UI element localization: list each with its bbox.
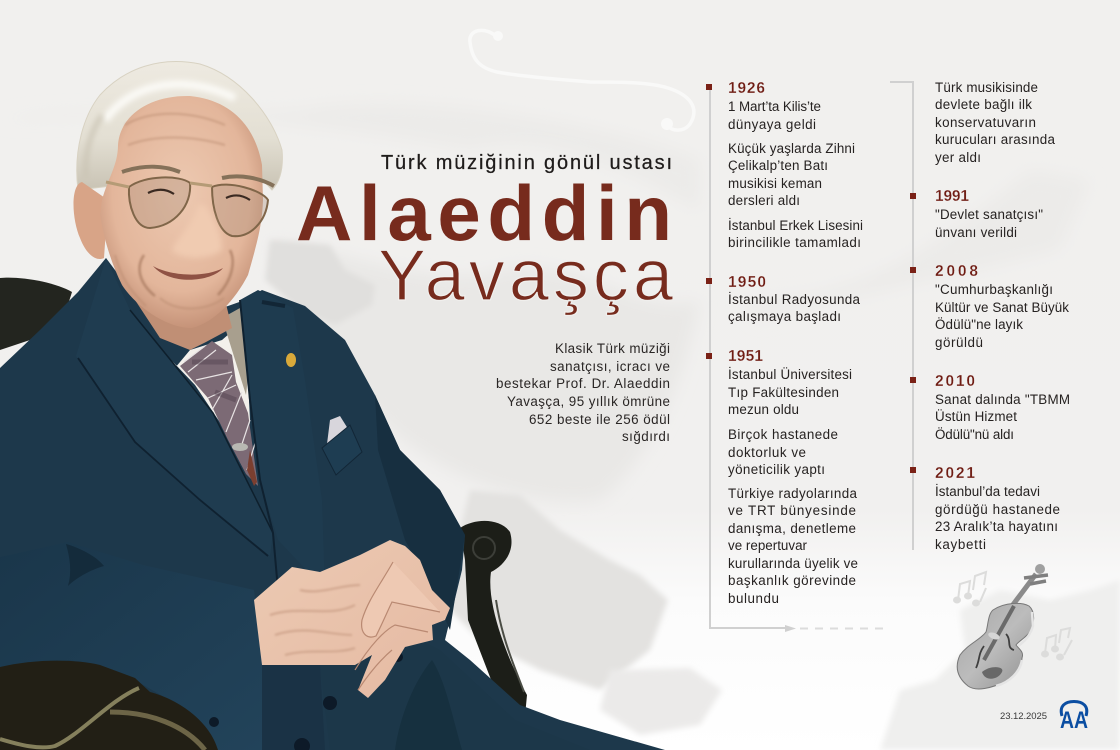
timeline entry 1926: dünyaya geldi xyxy=(728,117,816,132)
timeline markers xyxy=(706,84,916,473)
decorative violin scroll xyxy=(470,30,694,130)
timeline entry 1951: ve repertuvar xyxy=(728,538,808,553)
timeline entry 1991: "Devlet sanatçısı" xyxy=(935,207,1043,222)
timeline entry 1926: 1 Mart’ta Kilis’te xyxy=(728,99,821,114)
timeline entry 2010: Üstün Hizmet xyxy=(935,409,1017,424)
timeline entry 2010: Ödülü"nü aldı xyxy=(935,427,1014,442)
timeline line: first column with arrow xyxy=(710,87,890,632)
icon: AA logo xyxy=(1060,702,1088,734)
timeline entry 2021: İstanbul’da tedavi xyxy=(935,484,1040,499)
timeline entry 2021: 23 Aralık’ta hayatını xyxy=(935,519,1058,534)
timeline continued text xyxy=(935,80,1056,165)
heading: Alaeddin: Alaeddin xyxy=(296,169,672,257)
timeline entry 1951: İstanbul Üniversitesi xyxy=(728,367,852,382)
timeline entry 1991: 1991 xyxy=(935,188,969,205)
timeline entry 2021 xyxy=(935,465,1060,552)
left arm sleeve xyxy=(0,542,263,750)
timeline entry 1951: doktorluk ve xyxy=(728,445,806,460)
left lapel xyxy=(76,258,273,556)
timeline entry 2021: 2021 xyxy=(935,465,975,482)
timeline entry 1950: 1950 xyxy=(728,274,766,291)
timeline continued text: devlete bağlı ilk xyxy=(935,97,1032,112)
timeline entry 2008: 2008 xyxy=(935,263,978,280)
timeline entry 1991: ünvanı verildi xyxy=(935,225,1017,240)
timeline entry 2008: "Cumhurbaşkanlığı xyxy=(935,282,1053,297)
timeline entry 1951: Birçok hastanede xyxy=(728,427,838,442)
timeline entry 1926: Küçük yaşlarda Zihni xyxy=(728,141,855,156)
intro text block: Yavaşça, 95 yıllık ömrüne xyxy=(507,394,670,409)
timeline continued text: konservatuvarın xyxy=(935,115,1036,130)
chair back left xyxy=(0,278,72,350)
timeline entry 1926 xyxy=(728,80,863,250)
right dark sleeve xyxy=(375,395,465,630)
timeline entry 1951: mezun oldu xyxy=(728,402,799,417)
timeline entry 1926: musikisi keman xyxy=(728,176,822,191)
armchair armrest xyxy=(0,661,218,750)
timeline entry 1951: ve TRT bünyesinde xyxy=(728,503,856,518)
timeline entry 1951 xyxy=(728,348,858,606)
timeline entry 2008 xyxy=(935,263,1069,350)
timeline continued text: kurucuları arasında xyxy=(935,132,1056,147)
timeline entry 2021: gördüğü hastanede xyxy=(935,502,1060,517)
jacket xyxy=(0,258,665,750)
timeline entry 2008: Kültür ve Sanat Büyük xyxy=(935,300,1069,315)
timeline entry 1951: 1951 xyxy=(728,348,763,365)
timeline entry 1951: bulundu xyxy=(728,591,779,606)
glasses xyxy=(106,177,268,236)
timeline entry 1991 xyxy=(935,188,1043,240)
neck xyxy=(135,300,232,350)
timeline entry 1951: danışma, denetleme xyxy=(728,521,856,536)
timeline entry 2021: kaybetti xyxy=(935,537,986,552)
timeline continued text: Türk musikisinde xyxy=(935,80,1038,95)
chair arm right xyxy=(460,521,527,716)
ear xyxy=(74,182,108,259)
timeline entry 1950 xyxy=(728,274,861,324)
pocket with white square xyxy=(322,416,362,475)
timeline entry 1951: kurullarında üyelik ve xyxy=(728,556,858,571)
timeline entry 1926: Çelikalp’ten Batı xyxy=(728,158,828,173)
timeline entry 1951: yöneticilik yaptı xyxy=(728,462,825,477)
timeline entry 1950: çalışmaya başladı xyxy=(728,309,841,324)
hands xyxy=(254,540,450,698)
timeline entry 1950: İstanbul Radyosunda xyxy=(728,292,861,307)
date: 23.12.2025 xyxy=(1000,711,1047,722)
timeline entry 2010: 2010 xyxy=(935,373,975,390)
intro text block xyxy=(496,341,670,444)
lower jacket folds xyxy=(262,665,325,750)
icon: AA logo: AA xyxy=(1060,707,1088,734)
hair xyxy=(77,62,282,190)
timeline entry 2010: Sanat dalında "TBMM xyxy=(935,392,1070,407)
timeline line: second column xyxy=(890,82,913,550)
icon: violin xyxy=(957,564,1048,689)
timeline entry 1951: Tıp Fakültesinden xyxy=(728,385,839,400)
timeline entry 1926: İstanbul Erkek Lisesini xyxy=(728,218,863,233)
heading: Yavaşça: Yavaşça xyxy=(378,236,674,316)
intro text block: sığdırdı xyxy=(622,429,670,444)
icon: music notes right of violin xyxy=(1042,628,1072,660)
gold lapel pin xyxy=(286,353,296,367)
icon: music notes left of violin xyxy=(954,572,986,606)
intro text block: bestekar Prof. Dr. Alaeddin xyxy=(496,376,670,391)
timeline continued text: yer aldı xyxy=(935,150,981,165)
timeline entry 1926: dersleri aldı xyxy=(728,193,800,208)
timeline entry 1951: başkanlık görevinde xyxy=(728,573,856,588)
eyebrows xyxy=(122,167,274,186)
heading: subtitle: Türk müziğinin gönül ustası xyxy=(381,152,672,174)
timeline entry 1926: 1926 xyxy=(728,80,765,97)
timeline entry 2008: görüldü xyxy=(935,335,983,350)
timeline entry 1951: Türkiye radyolarında xyxy=(728,486,858,501)
right lapel and front xyxy=(240,290,325,590)
striped tie xyxy=(180,341,258,486)
timeline entry 2008: Ödülü"ne layık xyxy=(935,317,1023,332)
smile and wrinkles xyxy=(153,266,223,280)
nose xyxy=(172,205,222,258)
intro text block: sanatçısı, icracı ve xyxy=(550,359,670,374)
timeline entry 2010 xyxy=(935,373,1070,442)
timeline entry 1926: birincilikle tamamladı xyxy=(728,235,861,250)
intro text block: 652 beste ile 256 ödül xyxy=(529,412,670,427)
shirt collar xyxy=(135,320,250,470)
intro text block: Klasik Türk müziği xyxy=(555,341,670,356)
buttons xyxy=(323,696,337,710)
face xyxy=(100,96,263,328)
eyes xyxy=(148,190,250,200)
portrait: Alaeddin Yavaşça seated in armchair xyxy=(0,62,665,750)
